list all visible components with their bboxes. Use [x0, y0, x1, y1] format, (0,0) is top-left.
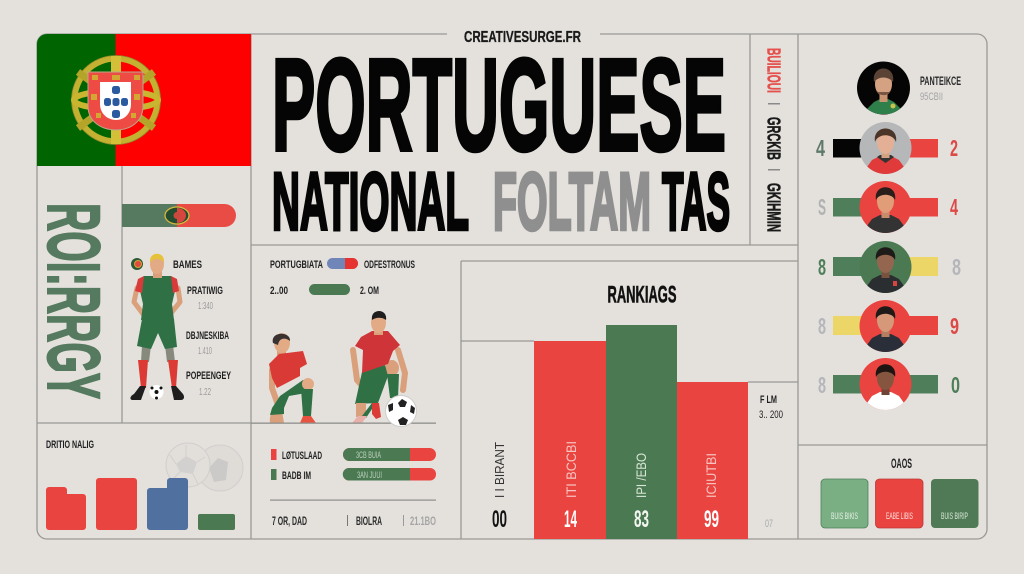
title — [272, 31, 730, 248]
player stat labels: 1.22 — [199, 387, 211, 398]
vertical side labels — [764, 48, 784, 232]
panel: odds boxes — [821, 455, 978, 528]
bar chart: rankings — [492, 325, 783, 539]
player list: featured player — [857, 62, 961, 114]
pill: flag colors — [327, 258, 358, 269]
player row 4 — [818, 241, 961, 293]
legend with progress bars — [271, 448, 436, 482]
bar chart: rankings: 14 — [564, 506, 577, 533]
player stat labels: BAMES — [173, 259, 202, 271]
player row 2: 4 — [816, 135, 825, 161]
footer stats: 7 OR, DAD — [272, 514, 307, 528]
bar chart: rankings: IPI /EBO — [633, 453, 649, 498]
legend with progress bars: 3CB BUIA — [356, 450, 381, 460]
text: TAS — [662, 156, 730, 248]
panel: comparison header: 2. OM — [360, 285, 379, 297]
player row 5: 8 — [818, 313, 826, 339]
panel: comparison header — [270, 258, 415, 297]
player stat labels: POPEENGEY — [186, 370, 231, 382]
footer stats: BIOLRA — [356, 514, 382, 528]
vertical heading: ROI:RRGY — [32, 203, 115, 399]
vertical side labels: GRCKIB — [764, 117, 784, 160]
player row 6: 8 — [818, 372, 826, 398]
ground line — [251, 422, 436, 424]
player stat labels: PRATIWIG — [187, 285, 223, 297]
player row 2: 2 — [950, 135, 958, 161]
legend with progress bars: LØTUSLAAD — [282, 450, 322, 462]
panel: odds boxes: BUIS BIRIP — [941, 511, 968, 521]
player row 3: S — [818, 194, 826, 220]
bar chart: rankings: ITI BCCBI — [563, 441, 579, 498]
player row 3: 4 — [950, 194, 958, 220]
player stat labels: DBJNESKIBA — [186, 330, 229, 342]
site credit: CREATIVESURGE.FR — [464, 29, 581, 46]
bar chart: rankings: 83 — [634, 506, 649, 533]
player row 6: 0 — [951, 372, 960, 398]
bar chart: rankings: ICIUTBI — [703, 453, 719, 498]
bar chart: rankings: 00 — [492, 506, 507, 533]
player row 5: 9 — [950, 313, 959, 339]
flag of Portugal — [37, 34, 252, 166]
player figure: kneeling right — [352, 311, 405, 423]
player stat labels: 1.410 — [198, 346, 212, 357]
player figure: kneeling left — [269, 333, 316, 423]
panel: odds boxes: OAOS — [891, 455, 912, 471]
footer stats — [272, 514, 436, 528]
panel: comparison header: 2..00 — [270, 285, 288, 297]
panel: bottom-left bars — [46, 439, 243, 530]
bar chart: rankings: 07 — [765, 518, 773, 530]
icon: ghost soccer balls — [166, 443, 243, 491]
vertical side labels: BUILIOUI — [764, 48, 784, 93]
player row 4: 8 — [818, 254, 826, 280]
vertical side labels: GKIHMIN — [764, 183, 784, 232]
player row 4: 8 — [952, 254, 961, 280]
footer stats: 21.1BO — [410, 514, 436, 528]
bar chart: rankings: 99 — [704, 506, 719, 533]
player stat labels: 1:340 — [198, 301, 213, 312]
panel: odds boxes: EABE LIBIS — [886, 511, 913, 521]
icon: armillary emblem — [72, 56, 160, 144]
panel: comparison header: ODFESTRONUS — [364, 259, 415, 271]
title: NATIONAL — [272, 156, 469, 248]
legend with progress bars: 3AN JUUI — [357, 470, 382, 480]
player stat labels — [173, 259, 231, 398]
player row 2 — [816, 122, 958, 174]
banner with emblem — [122, 204, 236, 227]
bar chart: rankings: I I BIRANT — [492, 442, 507, 498]
title: FOLTAM — [493, 156, 651, 248]
player list: featured player: 95CBII — [920, 91, 943, 103]
icon: soccer ball large — [386, 396, 416, 426]
player figure: full body — [130, 254, 184, 400]
bar chart: rankings: 3.. 200 — [759, 409, 783, 421]
bar chart: rankings: F LM — [760, 394, 777, 406]
player list: featured player: PANTEIKCE — [920, 74, 961, 88]
player row 6 — [818, 358, 960, 410]
panel: bottom-left bars: DRITIO NALIG — [46, 439, 94, 451]
player row 3 — [818, 181, 958, 233]
legend with progress bars: BADB IM — [282, 470, 311, 482]
small emblem — [131, 258, 143, 270]
rankings heading: RANKIAGS — [608, 282, 676, 308]
player row 5 — [818, 300, 959, 352]
icon: soccer ball — [150, 385, 164, 400]
panel: comparison header: PORTUGBIATA — [270, 259, 323, 271]
panel: odds boxes: BUIS BIKIS — [831, 511, 858, 521]
